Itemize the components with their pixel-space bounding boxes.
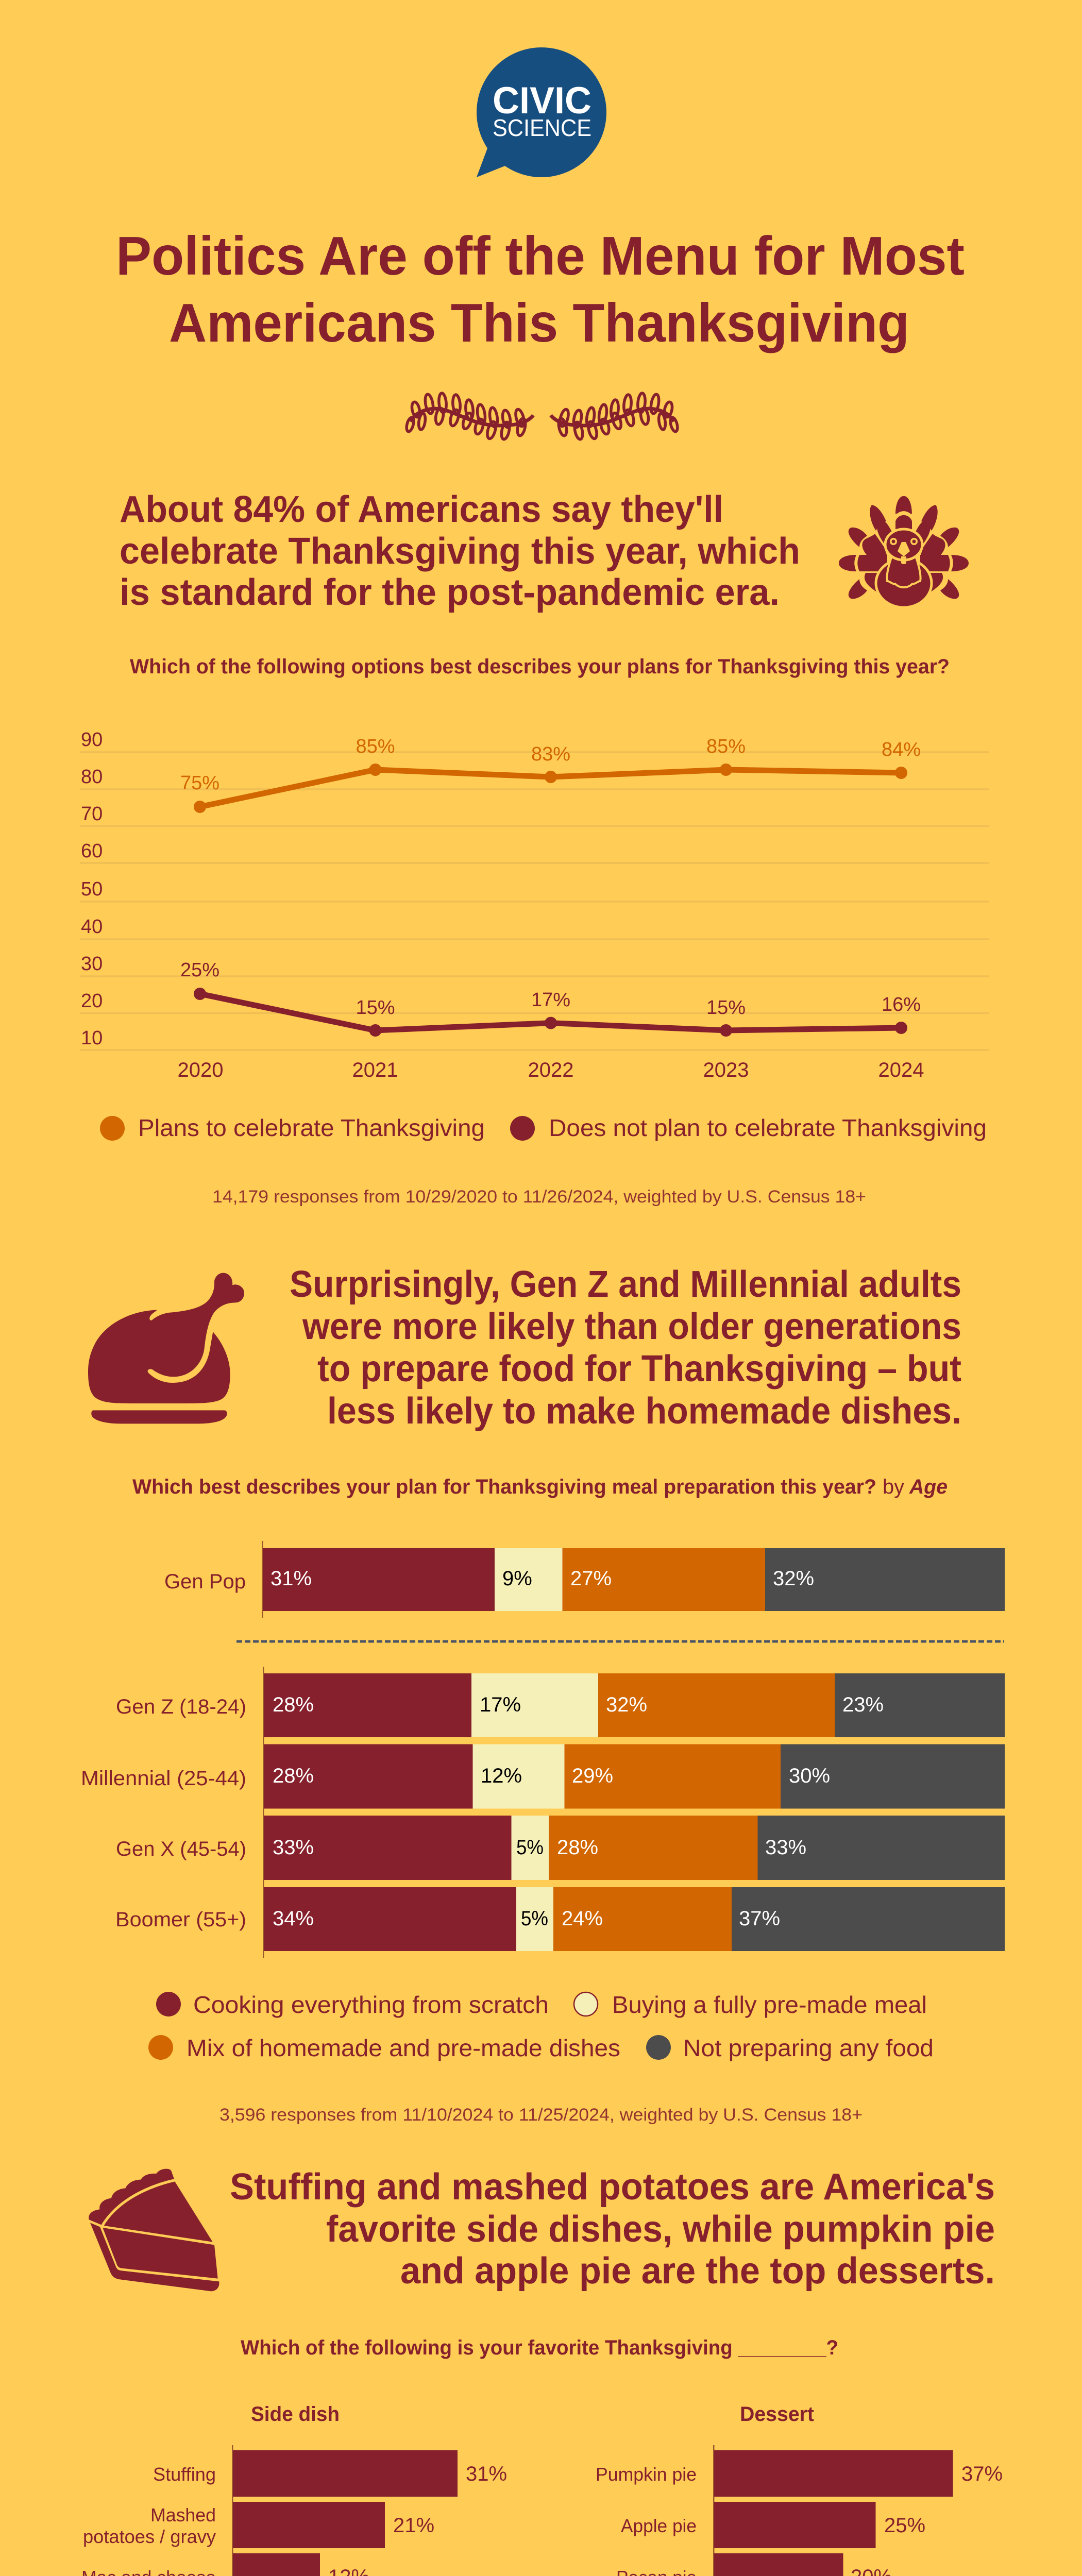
stacked bar chart: gen pop meal preparation: 31% [270, 1567, 312, 1590]
line chart: plans to celebrate [80, 729, 989, 1081]
row: Boomer [115, 1887, 1005, 1951]
logo: CivicScience speech bubble [477, 47, 606, 177]
series: plans to celebrate: 83% [531, 743, 570, 765]
row: Millennial: 29% [572, 1765, 613, 1787]
logo: CivicScience speech bubble: SCIENCE [493, 114, 591, 141]
row: Gen Z [116, 1673, 1005, 1737]
row: Boomer: 34% [273, 1907, 314, 1930]
y axis labels: 30 [81, 953, 103, 975]
y axis labels: 10 [81, 1027, 103, 1049]
bar chart: dessert: 25% [884, 2514, 925, 2537]
row: Gen Z: 28% [273, 1693, 314, 1716]
x axis labels: 2024 [878, 1059, 924, 1081]
chart heading: dessert: Dessert [740, 2403, 814, 2426]
series: does not plan to celebrate: 16% [882, 994, 921, 1015]
y axis labels: 40 [81, 916, 103, 938]
question: meal preparation by age: Which best describes your plan for Thanksgiving meal preparation this year? [132, 1476, 876, 1498]
question: favorite dishes: Which of the following is your favorite Thanksgiving ________? [241, 2336, 838, 2359]
title: Politics Are off the Menu for Most [116, 226, 965, 286]
bar chart: side dish: 31% [466, 2463, 507, 2485]
question: celebration plans: Which of the following options best describes your plans for Thanksgiving this year? [130, 655, 950, 678]
footnote: meal preparation: 3,596 responses from 11/10/2024 to 11/25/2024, weighted by U.S. Census 18+ [219, 2105, 863, 2125]
heading: section 2: Surprisingly, Gen Z and Millennial adults [290, 1264, 961, 1305]
row: Gen Z: 17% [480, 1693, 521, 1716]
x axis labels [178, 1059, 924, 1081]
row: Gen Z: 23% [842, 1693, 884, 1716]
heading: section 2: were more likely than older generations [302, 1306, 961, 1347]
legend: meal preparation: Mix of homemade and pre-made dishes [187, 2035, 620, 2061]
bar chart: side dish: potatoes / gravy [83, 2526, 216, 2547]
series: does not plan to celebrate [180, 959, 921, 1037]
row: Boomer: Boomer (55+) [115, 1908, 246, 1931]
row: Gen X: 28% [557, 1836, 598, 1859]
y axis labels: 20 [81, 990, 103, 1012]
row: Gen X: 5% [516, 1836, 544, 1859]
row: Millennial: Millennial (25-44) [81, 1767, 246, 1790]
logo: CivicScience speech bubble: CIVIC [493, 80, 591, 122]
row: Millennial [81, 1744, 1005, 1808]
heading: section 3: favorite side dishes, while pumpkin pie [326, 2209, 995, 2250]
stacked bar chart: gen pop meal preparation: 27% [570, 1567, 612, 1590]
y axis labels: 80 [81, 766, 103, 788]
y axis labels: 90 [81, 729, 103, 751]
row: Gen X: 33% [273, 1836, 314, 1859]
bar chart: dessert: Pumpkin pie [596, 2464, 697, 2485]
footnote: celebration: 14,179 responses from 10/29/2020 to 11/26/2024, weighted by U.S. Census 18+ [212, 1187, 866, 1207]
heading: section 2: less likely to make homemade dishes. [327, 1391, 961, 1432]
row: Millennial: 12% [481, 1765, 522, 1787]
legend: meal preparation: Cooking everything from scratch [193, 1991, 549, 2018]
bar chart: side dish: 21% [393, 2514, 434, 2537]
icon: turkey [839, 496, 969, 607]
heading: section 1: About 84% of Americans say they'll [120, 489, 723, 530]
legend: meal preparation: Not preparing any food [683, 2035, 934, 2061]
heading: section 1: celebrate Thanksgiving this year, which [120, 531, 800, 572]
bar chart: side dish: Stuffing [153, 2464, 216, 2485]
heading: section 1: is standard for the post-pandemic era. [120, 572, 780, 613]
row: Gen Z: Gen Z (18-24) [116, 1696, 246, 1718]
question: meal preparation by age: by [883, 1476, 904, 1498]
row: Gen Z: 32% [606, 1693, 647, 1716]
stacked bar chart: meal preparation by generation [81, 1667, 1005, 1958]
row: Millennial: 28% [273, 1765, 314, 1787]
legend: meal preparation [148, 1991, 934, 2061]
legend: celebration [100, 1114, 987, 1141]
series: plans to celebrate: 85% [356, 736, 395, 757]
stacked bar chart: gen pop meal preparation: 32% [773, 1567, 814, 1590]
heading: section 2 [290, 1264, 961, 1432]
row: Gen X: Gen X (45-54) [116, 1838, 246, 1860]
icon: roast turkey [88, 1273, 244, 1423]
row: Gen X: 33% [765, 1836, 806, 1859]
chart heading: side dish: Side dish [251, 2403, 340, 2426]
row: Millennial: 30% [789, 1765, 830, 1787]
series: does not plan to celebrate: 15% [356, 997, 395, 1019]
series: does not plan to celebrate: 17% [531, 989, 570, 1011]
series: plans to celebrate [180, 736, 921, 813]
heading: section 1 [120, 489, 800, 613]
x axis labels: 2020 [178, 1059, 223, 1081]
stacked bar chart: gen pop meal preparation: Gen Pop [164, 1570, 246, 1593]
row: Boomer: 37% [739, 1907, 780, 1930]
icon: pie slice [89, 2169, 219, 2291]
stacked bar chart: gen pop meal preparation: 9% [502, 1567, 532, 1590]
row: Boomer: 24% [562, 1907, 603, 1930]
bar chart: side dish [81, 2403, 507, 2576]
series: does not plan to celebrate: 15% [706, 997, 746, 1019]
row: Boomer: 5% [521, 1907, 548, 1930]
bar chart: dessert: Apple pie [621, 2515, 697, 2536]
y axis labels: 50 [81, 878, 103, 900]
y axis labels: 70 [81, 803, 103, 825]
x axis labels: 2022 [528, 1059, 573, 1081]
series: plans to celebrate: 75% [180, 772, 219, 794]
bar chart: dessert: 37% [961, 2463, 1003, 2485]
legend: celebration: Does not plan to celebrate Thanksgiving [549, 1114, 987, 1141]
legend: celebration: Plans to celebrate Thanksgiving [138, 1114, 485, 1141]
bar chart: side dish: Mashed [150, 2504, 216, 2526]
bar chart: dessert [559, 2403, 1003, 2576]
heading: section 3: and apple pie are the top desserts. [400, 2250, 995, 2292]
heading: section 2: to prepare food for Thanksgiving – but [317, 1348, 961, 1389]
series: plans to celebrate: 85% [706, 736, 746, 757]
y axis labels: 60 [81, 840, 103, 862]
series: does not plan to celebrate: 25% [180, 959, 219, 981]
y axis labels [81, 729, 103, 1049]
question: meal preparation by age: Age [909, 1476, 948, 1498]
row: Gen X [116, 1816, 1005, 1880]
icon: wheat sprig divider [405, 393, 679, 440]
title [116, 226, 965, 353]
legend: meal preparation: Buying a fully pre-made meal [612, 1991, 927, 2018]
heading: section 3: Stuffing and mashed potatoes are America's [230, 2166, 995, 2208]
stacked bar chart: gen pop meal preparation [164, 1541, 1005, 1618]
x axis labels: 2023 [703, 1059, 749, 1081]
series: plans to celebrate: 84% [882, 739, 921, 760]
title: Americans This Thanksgiving [169, 293, 909, 353]
x axis labels: 2021 [352, 1059, 398, 1081]
heading: section 3 [230, 2166, 995, 2292]
